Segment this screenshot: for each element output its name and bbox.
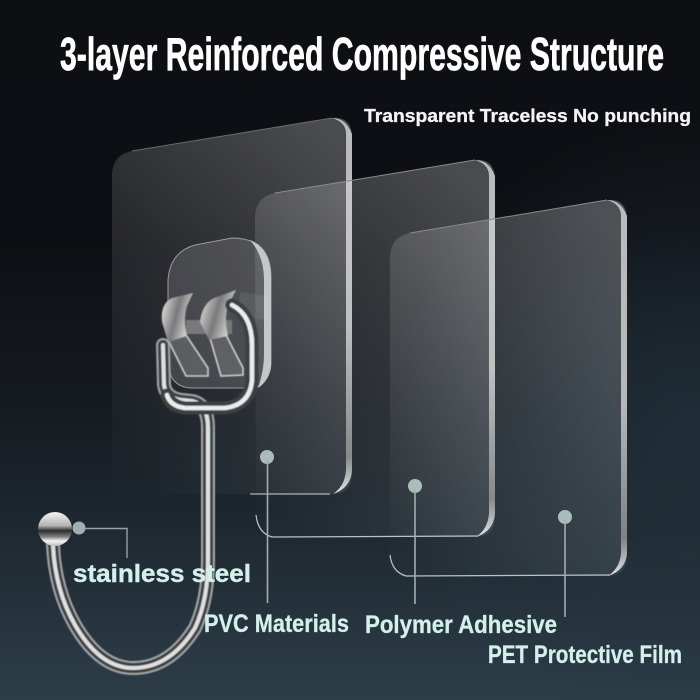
panel: polymer adhesive layer — [255, 160, 495, 537]
panel: PET protective film layer — [390, 200, 627, 576]
panel: PVC materials layer — [112, 118, 352, 494]
label: Polymer Adhesive: Polymer Adhesive — [365, 611, 557, 639]
icon: stainless steel hook — [53, 305, 252, 668]
label: PVC Materials: PVC Materials — [204, 610, 349, 638]
callout line: PET protective film — [558, 510, 572, 617]
callout line: PVC materials — [260, 450, 274, 603]
subtitle: Transparent Traceless No punching — [364, 105, 691, 126]
icon: hook clips — [162, 290, 268, 376]
callout line: stainless steel — [72, 522, 127, 558]
icon: hook ball end — [38, 512, 72, 546]
label: stainless steel: stainless steel — [73, 560, 251, 588]
callout line: polymer adhesive — [408, 479, 422, 604]
icon: transparent hook base — [168, 238, 271, 388]
